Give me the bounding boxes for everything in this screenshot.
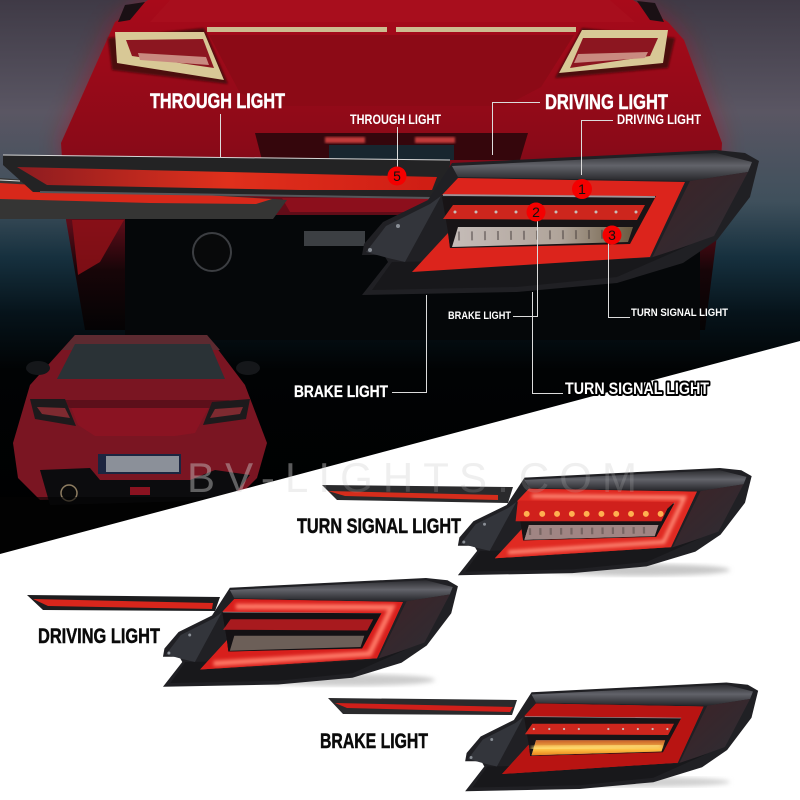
numbered marker 2 — [526, 202, 546, 222]
license plate recess — [255, 133, 528, 160]
numbered marker 1: 1 — [578, 181, 586, 197]
small car taillights — [30, 399, 250, 426]
label: driving light dark: DRIVING LIGHT — [38, 625, 160, 648]
watermark: BV-LIGHTS.COM — [187, 454, 637, 501]
exhaust tip — [193, 233, 231, 271]
rear reflector — [304, 231, 365, 246]
brake through bar — [328, 698, 517, 715]
dark photo background — [0, 0, 800, 560]
small car rear window — [57, 344, 225, 379]
label: brake light small: BRAKE LIGHT — [448, 310, 511, 322]
driving lamp — [163, 578, 458, 687]
label: brake light dark: BRAKE LIGHT — [320, 730, 428, 753]
lower bumper — [125, 215, 700, 340]
car through light strip — [207, 27, 576, 32]
label: turn signal light medium: TURN SIGNAL LIGHT — [565, 379, 710, 398]
small car lower left photo panel — [0, 335, 300, 557]
second through light bar (faded rear) — [0, 178, 287, 219]
numbered marker 2: 2 — [532, 204, 540, 220]
numbered marker 5 — [388, 166, 406, 186]
car rear photo — [61, 0, 722, 340]
small car license plate — [98, 454, 181, 474]
turn signal through bar — [322, 485, 513, 503]
small car mirrors — [26, 361, 260, 375]
turn signal lamp — [458, 468, 752, 575]
small car exhaust — [61, 485, 77, 501]
label: turn signal light small: TURN SIGNAL LIGHT — [631, 307, 728, 319]
car trunk lid — [209, 35, 574, 106]
car left taillight — [108, 28, 228, 84]
small car lower bumper — [40, 468, 250, 505]
label: brake light medium: BRAKE LIGHT — [294, 382, 388, 401]
label: through light large: THROUGH LIGHT — [150, 90, 285, 113]
main tail lamp — [362, 150, 759, 295]
numbered marker 3: 3 — [608, 227, 616, 243]
numbered marker 1 — [572, 179, 592, 199]
label: driving light large: DRIVING LIGHT — [545, 91, 668, 114]
small car trunk — [70, 405, 210, 436]
watermark: BV-LIGHTS.COM — [187, 454, 637, 501]
car right taillight — [555, 28, 675, 78]
small car body — [13, 335, 267, 500]
label: driving light small: DRIVING LIGHT — [617, 111, 701, 127]
white diagonal lower area — [0, 341, 800, 800]
callout lines — [220, 102, 630, 394]
numbered marker 3 — [602, 226, 622, 244]
driving through bar — [27, 595, 220, 611]
watermark — [190, 463, 634, 492]
main through light bar — [3, 155, 450, 198]
label: turn signal light dark: TURN SIGNAL LIGHT — [297, 515, 461, 538]
brake light lamp assembly — [328, 682, 758, 791]
turn signal lamp assembly — [322, 468, 752, 576]
numbered marker 5: 5 — [393, 168, 401, 184]
label: through light small: THROUGH LIGHT — [350, 111, 441, 127]
driving light lamp assembly — [27, 578, 458, 687]
brake lamp — [465, 682, 758, 791]
